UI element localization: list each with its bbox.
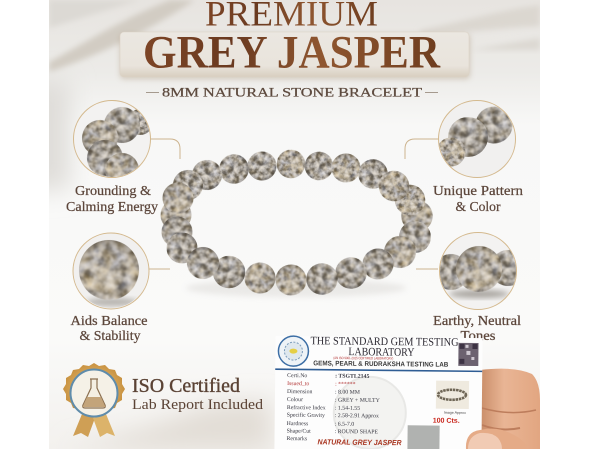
label: Earthy, Neutral — [433, 314, 521, 329]
icon: bead close-up circle 2 — [431, 100, 518, 178]
lab name: LABORATORY — [348, 346, 415, 359]
specification values: : 8.00 MM — [335, 390, 360, 396]
logo seal — [278, 336, 309, 366]
image caption: Image Approx — [444, 411, 466, 415]
lab name: GEMS, PEARL & RUDRAKSHA TESTING LAB — [313, 360, 448, 369]
callout: Unique Pattern & Color: & Color — [456, 200, 501, 215]
specification values: : 2.58-2.91 Approx — [335, 413, 379, 420]
bracelet shadow — [186, 279, 406, 297]
specification labels: Dimension — [287, 389, 313, 395]
label: Aids Balance — [70, 314, 148, 329]
connector lines — [149, 139, 438, 269]
lab certificate card — [274, 335, 483, 449]
specification values: : GREY + MULTY — [335, 398, 381, 404]
specification labels: Refractive Index — [287, 404, 326, 411]
specification values: : 1.54-1.55 — [335, 406, 360, 412]
watermark — [333, 377, 406, 449]
callout: Earthy, Neutral Tones: Tones — [460, 329, 496, 344]
text: ISO Certified: ISO Certified — [132, 376, 240, 397]
rosette — [63, 363, 125, 415]
thumb — [466, 428, 516, 449]
specification labels: Issued_to — [287, 381, 309, 387]
product image — [436, 381, 469, 409]
lab name: (AN ISO 9001-2015 CERTIFIED LABORATORY) — [333, 356, 393, 361]
lab name: THE STANDARD GEM TESTING — [310, 335, 459, 349]
weight: 100 carats: 100 Cts. — [433, 418, 460, 425]
specification values: : 6.5-7.0 — [335, 422, 354, 428]
specification labels: Colour — [287, 397, 303, 403]
label: Unique Pattern — [433, 184, 523, 199]
heading: GREY JASPER: GREY JASPER — [143, 26, 441, 78]
callout: Grounding & Calming Energy: Calming Energy — [66, 200, 158, 215]
hand holding the card — [480, 369, 540, 449]
badge: ISO certified rosette — [63, 363, 125, 437]
callout: Aids Balance & Stability — [70, 232, 149, 344]
specification values — [335, 374, 381, 436]
icon: bead close-up circle 4 — [439, 232, 517, 310]
specification values: : ROUND SHAPE — [335, 429, 379, 435]
remark: natural grey jasper: NATURAL GREY JASPER — [317, 437, 402, 447]
specification labels: Specific Gravity — [287, 412, 325, 419]
specification labels: Hardness — [287, 421, 309, 427]
label: Grounding & — [75, 184, 151, 199]
banner: GREY JASPER plaque — [120, 26, 470, 79]
specification labels: Shape/Cut — [287, 429, 311, 435]
callout: Unique Pattern & Color — [431, 100, 523, 215]
icon: bead close-up circle 3 — [71, 232, 149, 309]
callout: Grounding & Calming Energy — [66, 100, 158, 215]
ribbons — [73, 414, 95, 437]
subtitle: 8MM natural stone bracelet: 8MM NATURAL STONE BRACELET — [162, 84, 422, 100]
blue divider — [275, 368, 482, 372]
lab name — [310, 335, 459, 369]
hologram — [407, 425, 440, 449]
bracelet of grey jasper beads — [156, 146, 439, 299]
specification labels — [286, 373, 326, 442]
specification labels: Remarks — [286, 436, 308, 442]
text: Lab Report Included: Lab Report Included — [132, 397, 264, 413]
callout: Earthy, Neutral Tones — [433, 232, 521, 340]
icon: flask — [83, 379, 105, 408]
callout: Aids Balance & Stability: & Stability — [80, 329, 140, 344]
specification values: : TSGTL2145 — [335, 374, 370, 380]
specification labels: Certi.No — [287, 373, 307, 379]
specification values: : ****** — [335, 382, 356, 388]
QR code — [458, 343, 479, 366]
icon: bead close-up circle 1 — [73, 100, 151, 178]
